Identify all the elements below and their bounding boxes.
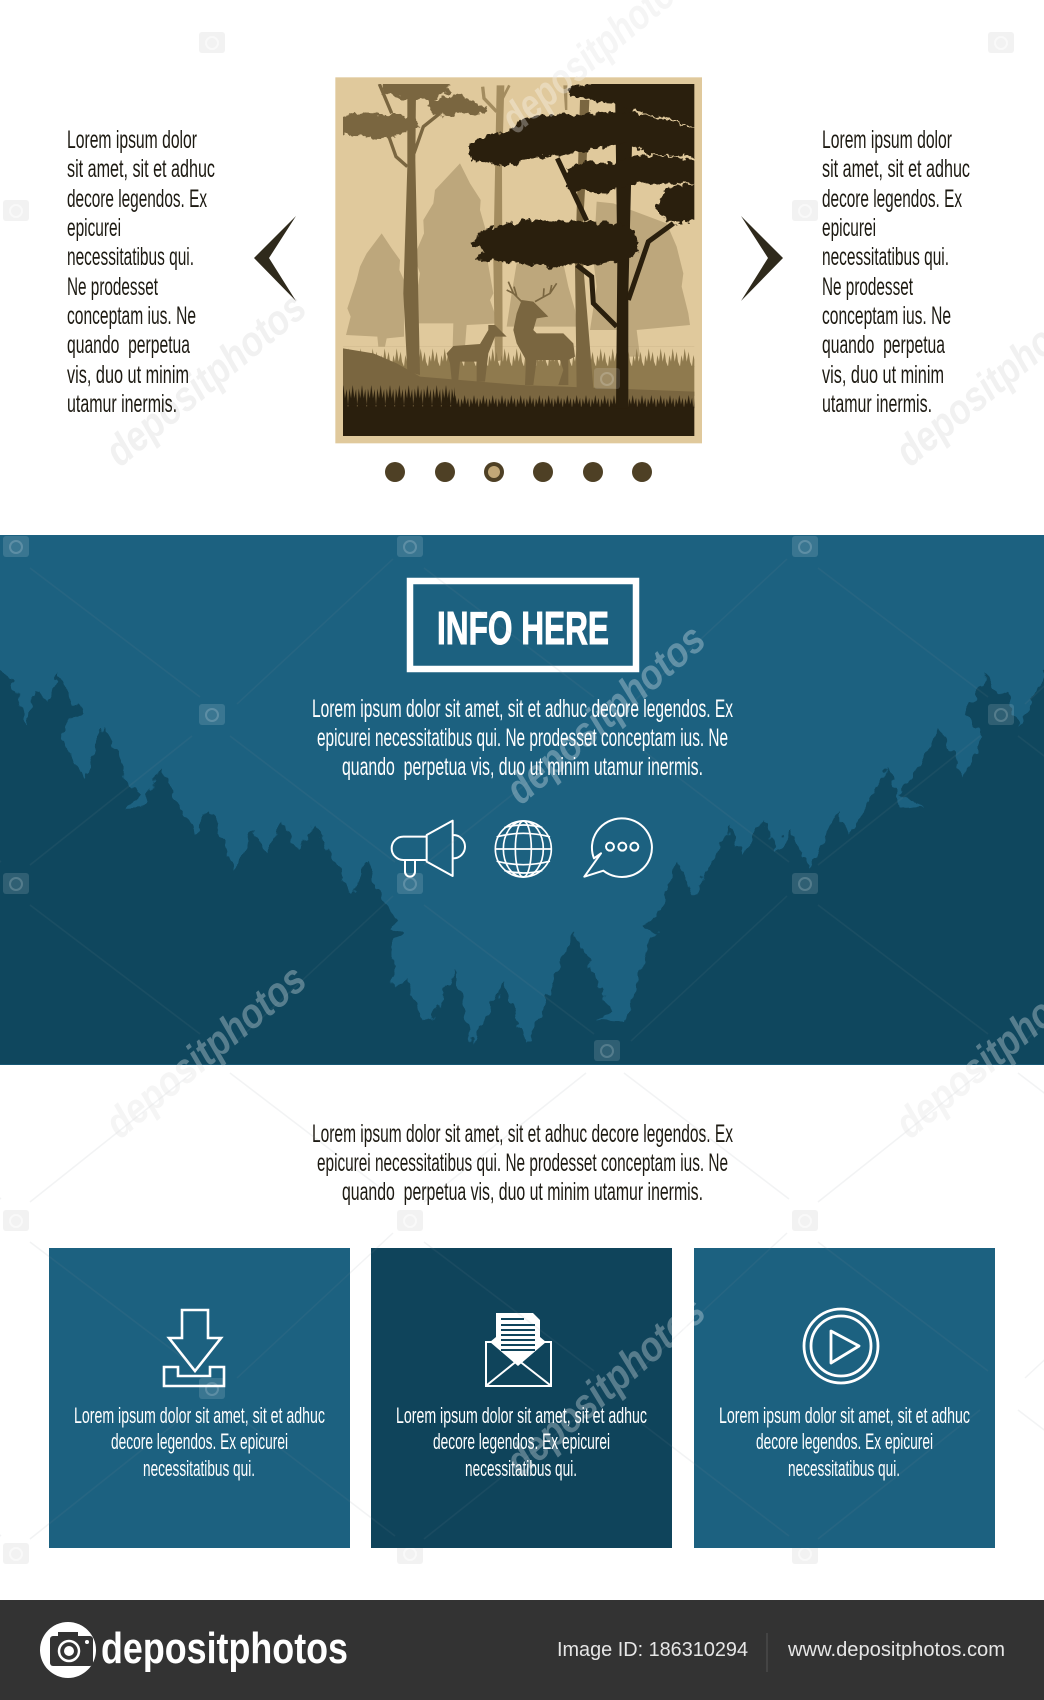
right text block: utamur inermis. [822, 390, 932, 418]
band paragraph: epicurei necessitatibus qui. Ne prodesset conceptam ius. Ne [317, 724, 728, 752]
right text block: Lorem ipsum dolor [822, 126, 952, 154]
watermark overlay: depositphotos [496, 615, 714, 813]
pale background trees [346, 163, 690, 357]
left text block: sit amet, sit et adhuc [67, 155, 215, 183]
intro paragraph [312, 1120, 733, 1206]
card text [719, 1403, 970, 1481]
left text block: conceptam ius. Ne [67, 302, 196, 330]
icon: megaphone [392, 821, 465, 877]
right text block: quando perpetua [822, 331, 945, 359]
icon: deer stag [507, 282, 575, 385]
website url: www.depositphotos.com [787, 1639, 1005, 1661]
icon: deer doe [447, 325, 507, 382]
left text block: epicurei [67, 214, 121, 242]
carousel dots [385, 462, 652, 482]
left text block: utamur inermis. [67, 390, 177, 418]
forest deer illustration [335, 77, 703, 443]
right text block [822, 126, 970, 418]
card text: decore legendos. Ex epicurei [111, 1429, 288, 1454]
image id: Image ID: 186310294 [557, 1639, 748, 1661]
card text: Lorem ipsum dolor sit amet, sit et adhuc [74, 1403, 325, 1428]
watermark overlay: depositphotos [496, 1287, 714, 1485]
faint watermarks on white: depositphotos [96, 955, 315, 1147]
right text block: conceptam ius. Ne [822, 302, 951, 330]
left acacia tree [340, 81, 488, 375]
watermark overlay: depositphotos [96, 955, 315, 1147]
card text [396, 1403, 647, 1481]
left text block: decore legendos. Ex [67, 185, 207, 213]
icon: speech bubble [584, 818, 652, 877]
forest silhouette [0, 671, 1044, 1088]
icon: download [164, 1310, 224, 1386]
right text block: necessitatibus qui. [822, 243, 949, 271]
back right trunk [575, 100, 593, 388]
intro paragraph: epicurei necessitatibus qui. Ne prodesset conceptam ius. Ne [317, 1149, 728, 1177]
left text block [67, 126, 215, 418]
panel: envelope card [371, 1248, 672, 1548]
right text block: decore legendos. Ex [822, 185, 962, 213]
card text: necessitatibus qui. [465, 1456, 577, 1481]
left text block: vis, duo ut minim [67, 361, 189, 389]
footer bar [0, 1600, 1044, 1700]
dark foreground tree [470, 78, 703, 408]
band paragraph [312, 695, 733, 781]
left text block: necessitatibus qui. [67, 243, 194, 271]
heading: INFO HERE: INFO HERE [437, 602, 609, 654]
right text block: Ne prodesset [822, 273, 913, 301]
faint watermarks on white: depositphotos [96, 283, 315, 475]
left text block: Lorem ipsum dolor [67, 126, 197, 154]
divider [766, 1633, 768, 1672]
band paragraph: quando perpetua vis, duo ut minim utamur inermis. [342, 753, 703, 781]
right text block: vis, duo ut minim [822, 361, 944, 389]
icon: depositphotos logo [40, 1622, 96, 1678]
icon: left arrow [254, 216, 296, 301]
icon: envelope [486, 1313, 551, 1386]
mid grass [343, 347, 694, 396]
left text block: Ne prodesset [67, 273, 158, 301]
card text: Lorem ipsum dolor sit amet, sit et adhuc [396, 1403, 647, 1428]
band paragraph: Lorem ipsum dolor sit amet, sit et adhuc decore legendos. Ex [312, 695, 733, 723]
intro paragraph: Lorem ipsum dolor sit amet, sit et adhuc decore legendos. Ex [312, 1120, 733, 1148]
panel: play card [694, 1248, 995, 1548]
right text block: epicurei [822, 214, 876, 242]
mid trunks [483, 85, 567, 362]
card text: necessitatibus qui. [788, 1456, 900, 1481]
icon: right arrow [741, 216, 783, 301]
icon: globe [495, 821, 551, 877]
intro paragraph: quando perpetua vis, duo ut minim utamur inermis. [342, 1178, 703, 1206]
card text: decore legendos. Ex epicurei [756, 1429, 933, 1454]
hill [343, 348, 694, 407]
card text: decore legendos. Ex epicurei [433, 1429, 610, 1454]
card text [74, 1403, 325, 1481]
panel: blue forest band [0, 535, 1044, 1088]
panel: download card [49, 1248, 350, 1548]
icon: play [804, 1309, 878, 1383]
footer brand name: depositphotos [101, 1624, 348, 1673]
heading: INFO HERE [410, 581, 636, 669]
card text: necessitatibus qui. [143, 1456, 255, 1481]
foreground grass [343, 385, 694, 436]
left text block: quando perpetua [67, 331, 190, 359]
